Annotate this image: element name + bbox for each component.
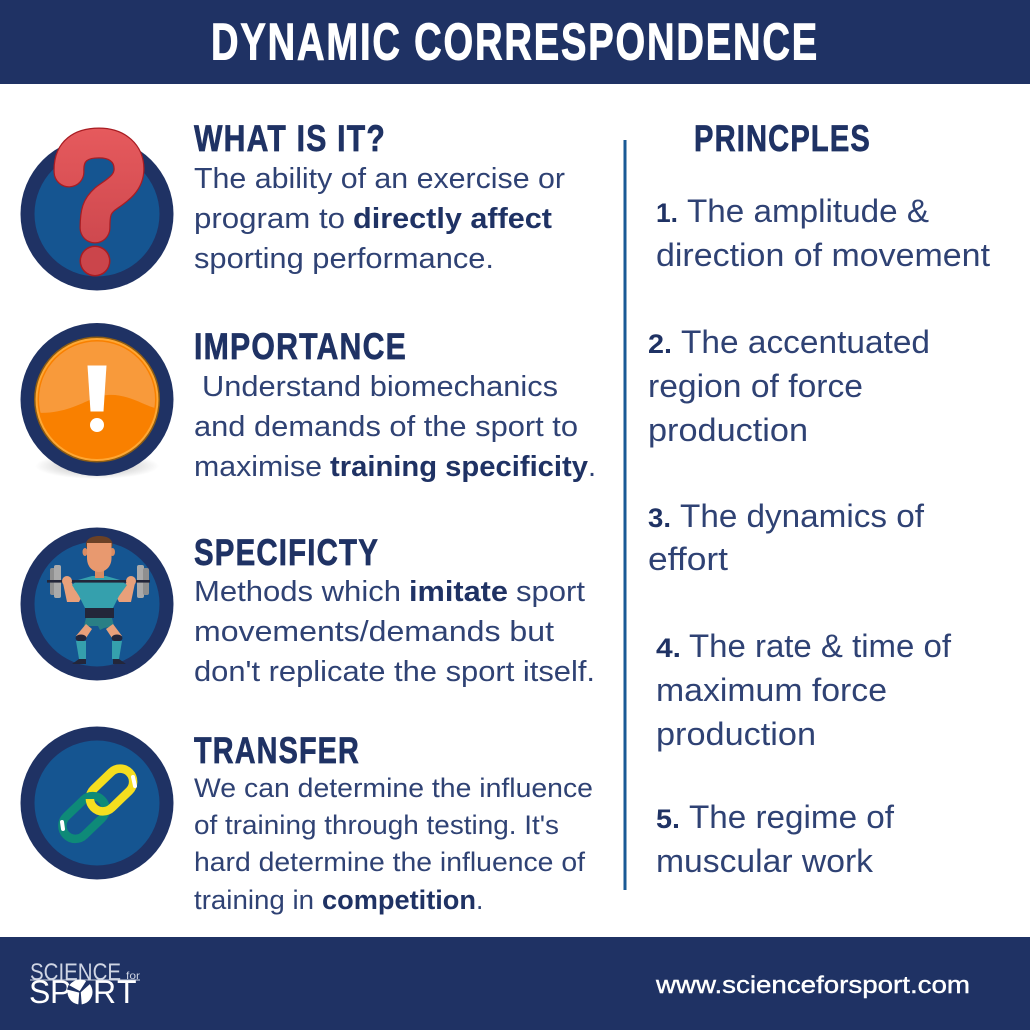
principle 3: effort [648,541,728,577]
principle 2: 2. [648,329,672,359]
icon: weightlifter [20,528,174,680]
principle 5: The regime of [689,799,894,835]
text block: specificity: Methods which [194,576,401,608]
text block: transfer: . [476,885,483,915]
principle 1 [656,193,990,273]
principle 4: production [656,716,816,752]
text block: specificity: don't replicate the sport itself. [194,656,595,688]
principle 3: 3. [648,503,671,533]
principle 3: The dynamics of [680,498,924,534]
text block: transfer: hard determine the influence of [194,847,586,877]
principle 4 [656,628,951,752]
footer banner [0,937,1030,1030]
text block: transfer: of training through testing. It's [194,810,559,840]
text block: importance: and demands of the sport to [194,411,578,443]
icon: question mark [20,138,174,290]
text block: transfer [194,773,593,915]
text block: specificity: sport [516,576,585,608]
principle 2 [648,324,930,448]
text block: importance [194,371,596,483]
text block: what is it: program to [194,203,345,235]
icon: exclamation mark [20,323,174,479]
text block: importance: . [588,451,596,483]
principle 5 [656,799,894,879]
logo: science for sport: SCIENCE [30,959,121,986]
text block: what is it: directly affect [353,203,552,235]
principle 3 [648,498,924,577]
principle 2: region of force [648,368,863,404]
text block: transfer: competition [322,885,476,915]
icon: chain link [20,726,174,880]
principle 1: The amplitude & [687,193,929,229]
text block: what is it: The ability of an exercise or [194,163,565,195]
text block: transfer: We can determine the influence [194,773,593,803]
panel: transfer [194,729,593,915]
heading: principles: PRINCPLES [694,117,871,159]
heading: importance: IMPORTANCE [194,325,407,367]
principle 4: maximum force [656,672,887,708]
title: DYNAMIC CORRESPONDENCE [211,14,819,72]
heading: what is it: WHAT IS IT? [194,117,386,159]
principle 2: The accentuated [681,324,930,360]
text block: specificity: imitate [409,576,508,608]
text block: specificity: movements/demands but [194,616,554,648]
panel: importance [194,325,596,483]
panel: principles [648,117,990,879]
text block: importance: maximise [194,451,322,483]
text block: what is it: sporting performance. [194,243,494,275]
principle 1: 1. [656,198,678,228]
header banner [0,0,1030,84]
text block: transfer: training in [194,885,314,915]
logo: science for sport [29,959,141,1010]
principle 5: 5. [656,804,680,834]
panel: specificity [194,531,595,688]
text block: importance: Understand biomechanics [202,371,558,403]
panel: what is it [194,117,565,275]
principle 4: 4. [656,633,681,663]
heading: transfer: TRANSFER [194,729,360,771]
logo: science for sport: SPORT [29,974,137,1010]
principle 1: direction of movement [656,237,990,273]
text block: what is it [194,163,565,275]
heading: specificity: SPECIFICTY [194,531,379,573]
text block: specificity [194,576,595,688]
logo: science for sport: for [126,971,141,982]
principle 2: production [648,412,808,448]
principle 4: The rate & time of [689,628,951,664]
website url: www.scienceforsport.com [655,972,970,999]
text block: importance: training specificity [330,451,588,483]
principle 5: muscular work [656,843,874,879]
